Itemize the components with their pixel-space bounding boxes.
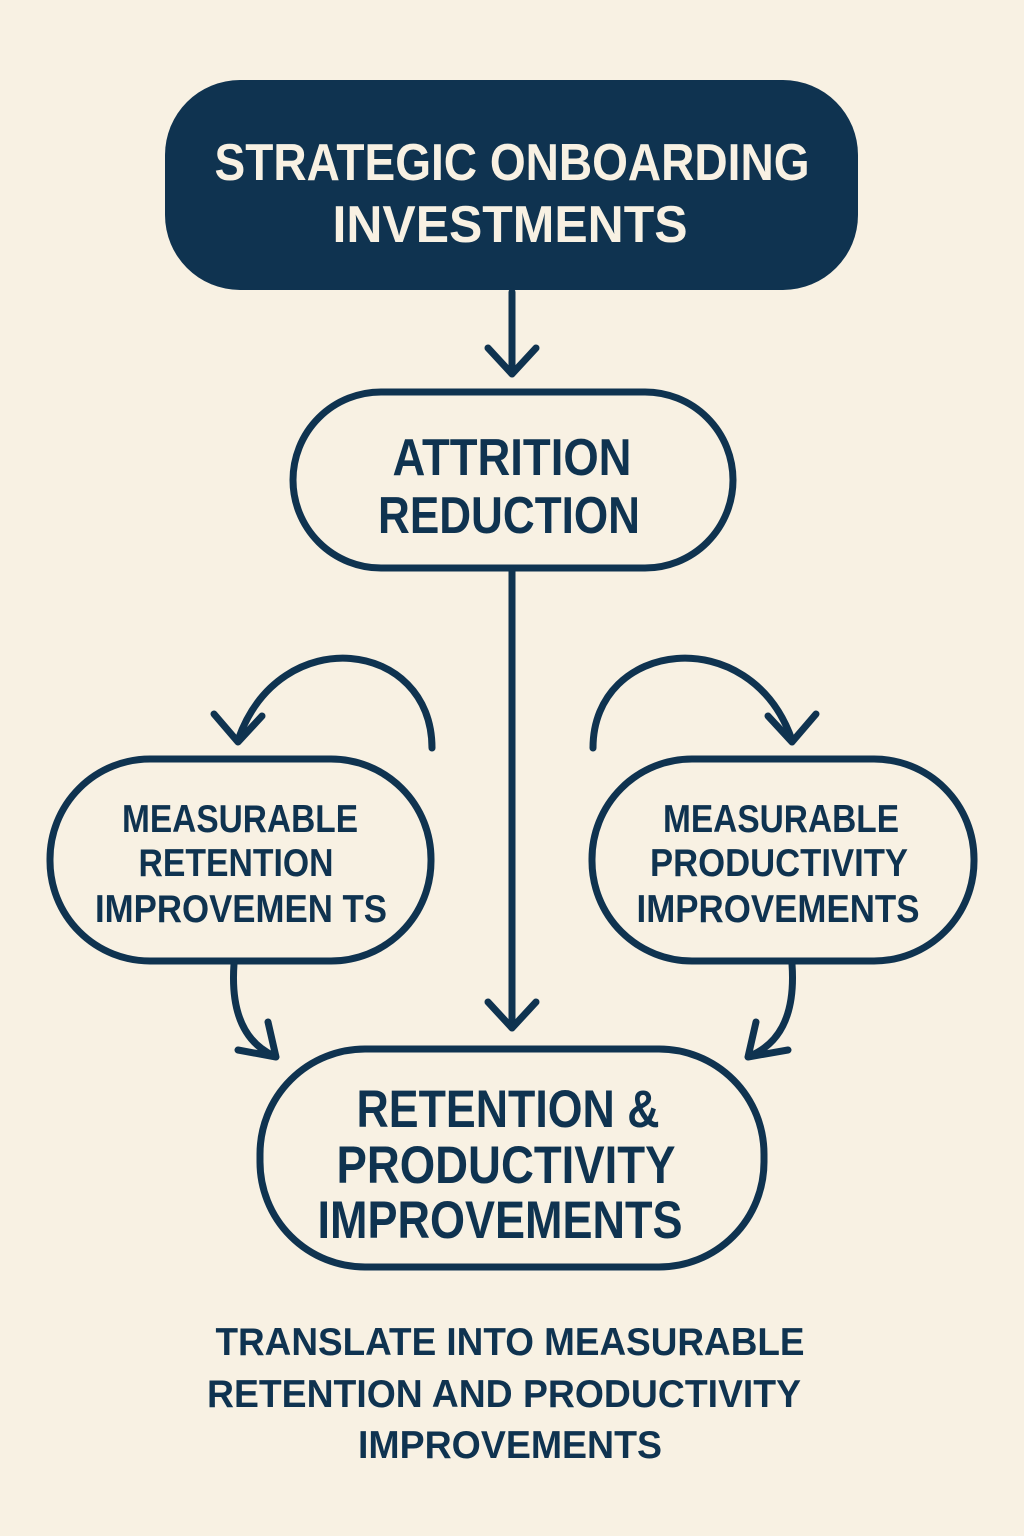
box: measurable retention improvements (50, 759, 431, 961)
box: attrition reduction (293, 392, 733, 568)
box: attrition reduction: ATTRITION (392, 429, 632, 487)
arrow: right box to final (748, 964, 793, 1057)
title box: INVESTMENTS (332, 196, 688, 254)
box: measurable retention improvements: IMPROVEMEN TS (95, 888, 387, 931)
arrow: title to attrition (488, 292, 536, 374)
arrow: right loop (593, 658, 816, 748)
title box (165, 80, 858, 290)
footer caption: IMPROVEMENTS (358, 1424, 662, 1467)
box: retention & productivity improvements: IMPROVEMENTS (318, 1191, 682, 1250)
box: measurable productivity improvements: IMPROVEMENTS (636, 888, 920, 931)
footer caption (207, 1321, 804, 1467)
box: retention & productivity improvements: RETENTION & (356, 1080, 660, 1139)
arrow: attrition to final (488, 570, 536, 1028)
box: measurable productivity improvements (592, 759, 974, 961)
box: measurable productivity improvements: MEASURABLE (663, 798, 899, 841)
arrow: left box to final (233, 964, 276, 1057)
box: attrition reduction: REDUCTION (378, 487, 640, 545)
box: retention & productivity improvements (260, 1049, 764, 1267)
box: measurable productivity improvements: PRODUCTIVITY (650, 842, 908, 885)
box: measurable retention improvements: RETENTION (138, 842, 334, 885)
arrow: left loop (214, 658, 432, 748)
box: measurable retention improvements: MEASURABLE (122, 798, 358, 841)
box: retention & productivity improvements: PRODUCTIVITY (336, 1136, 676, 1195)
footer caption: RETENTION AND PRODUCTIVITY (207, 1373, 801, 1416)
title box: STRATEGIC ONBOARDING (214, 134, 810, 192)
footer caption: TRANSLATE INTO MEASURABLE (216, 1321, 804, 1364)
